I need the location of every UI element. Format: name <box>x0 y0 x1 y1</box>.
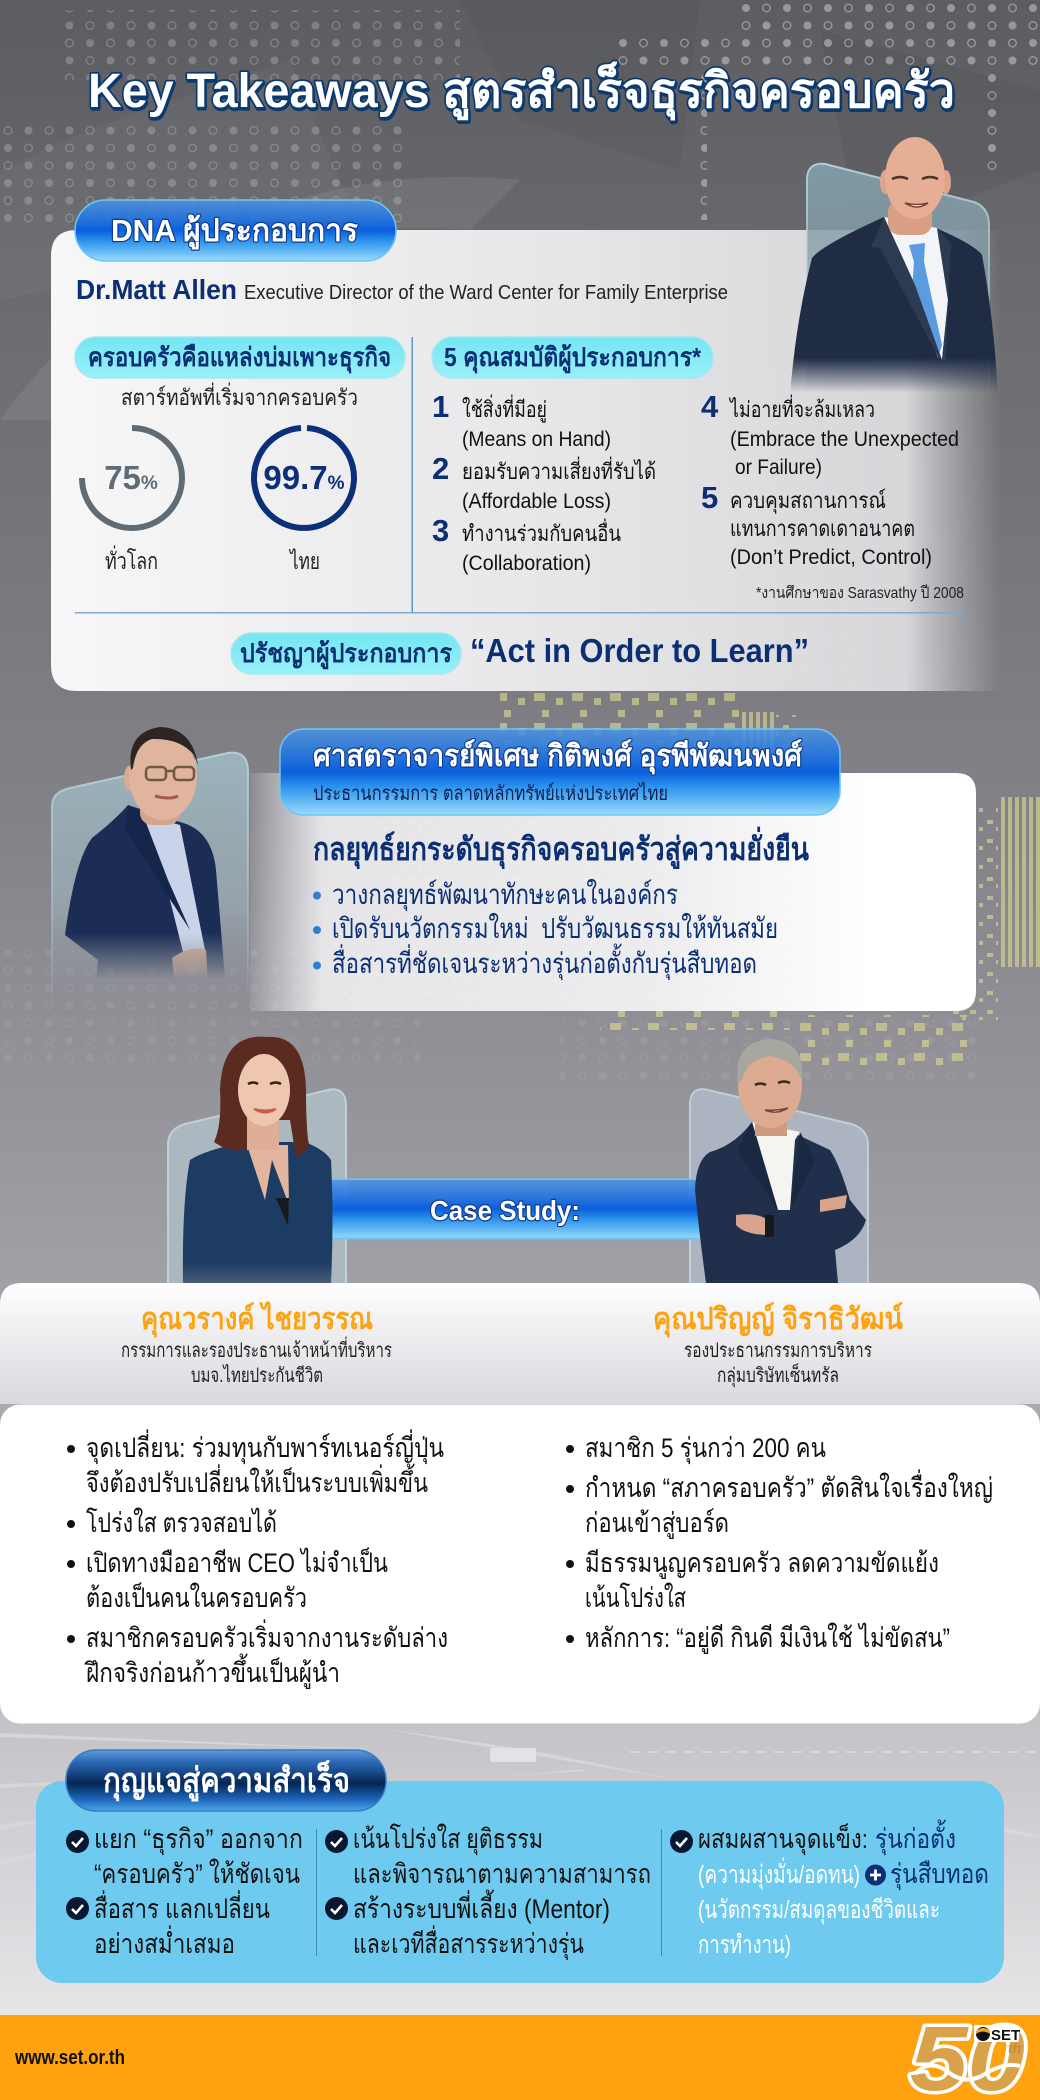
list: qualities column 1: 2 <box>432 451 449 486</box>
photo: chairman <box>65 727 226 990</box>
column 3: การทำงาน) <box>698 1931 791 1959</box>
logo: SET 50th: SET <box>991 2027 1020 2044</box>
speaker name: Dr.Matt Allen <box>76 274 237 305</box>
donut chart: 75%: 75% <box>104 459 158 496</box>
heading pill <box>66 1750 386 1811</box>
role: Parin: กลุ่มบริษัทเซ็นทรัล <box>717 1362 839 1388</box>
strategy bullets: สื่อสารที่ชัดเจนระหว่างรุ่นก่อตั้งกับรุ่นสืบทอด <box>332 943 757 981</box>
list: qualities column 1: ใช้สิ่งที่มีอยู่ <box>462 394 547 423</box>
list: qualities column 2: (Embrace the Unexpected <box>730 428 959 451</box>
panel: case study names <box>0 1283 1040 1404</box>
bullets: Parin: มีธรรมนูญครอบครัว ลดความขัดแย้ง <box>585 1548 939 1579</box>
bullets: Parin: สมาชิก 5 รุ่นกว่า 200 คน <box>585 1433 826 1465</box>
photo: Parin <box>695 1039 866 1283</box>
strategy bullets: เปิดรับนวัตกรรมใหม่ ปรับวัฒนธรรมให้ทันสมัย <box>332 912 778 944</box>
subheading: สตาร์ทอัพที่เริ่มจากครอบครัว <box>121 382 358 410</box>
donut chart: 99.7%: 99.7% <box>263 459 345 496</box>
column 2: เน้นโปร่งใส ยุติธรรม <box>353 1823 543 1856</box>
footer <box>0 2008 1040 2100</box>
list: qualities column 2: แทนการคาดเดาอนาคต <box>730 516 915 541</box>
strategy bullets <box>313 878 778 981</box>
name banner <box>280 729 840 815</box>
bullets: Warang <box>67 1429 448 1689</box>
column 3: ผสมผสานจุดแข็ง: <box>698 1821 868 1856</box>
list: qualities column 1: (Means on Hand) <box>462 428 611 451</box>
label: worldwide: ทั่วโลก <box>105 545 158 574</box>
glass card behind Parin <box>690 1089 868 1285</box>
logo: SET 50th: th <box>1008 2040 1021 2056</box>
panel: case study details <box>0 1404 1040 1724</box>
pill label: ปรัชญาผู้ประกอบการ <box>240 638 452 670</box>
column 2: และพิจารณาตามความสามารถ <box>353 1859 651 1889</box>
strategy heading: กลยุทธ์ยกระดับธุรกิจครอบครัวสู่ความยั่งยืน <box>313 826 809 870</box>
heading: กุญแจสู่ความสำเร็จ <box>103 1759 350 1802</box>
role: Warang: บมจ.ไทยประกันชีวิต <box>191 1364 323 1387</box>
bullets: Warang: จุดเปลี่ยน: ร่วมทุนกับพาร์ทเนอร์ญี่ปุ่น <box>86 1429 444 1465</box>
pill label: 5 คุณสมบัติผู้ประกอบการ* <box>444 342 702 374</box>
column 1: สื่อสาร แลกเปลี่ยน <box>94 1890 270 1924</box>
title: Key Takeaways สูตรสำเร็จธุรกิจครอบครัว <box>88 61 955 121</box>
strategy bullets: วางกลยุทธ์พัฒนาทักษะคนในองค์กร <box>332 878 678 912</box>
column 2: สร้างระบบพี่เลี้ยง (Mentor) <box>353 1889 610 1924</box>
pill: philosophy <box>231 633 461 674</box>
bullets: Warang: ต้องเป็นคนในครอบครัว <box>86 1580 307 1613</box>
photo: Dr. Matt Allen <box>790 137 998 395</box>
list: qualities column 1: ยอมรับความเสี่ยงที่รับได้ <box>462 456 656 484</box>
column 1: แยก “ธุรกิจ” ออกจาก <box>94 1824 303 1856</box>
speaker role: Executive Director of the Ward Center for Family Enterprise <box>244 282 728 304</box>
bullets: Warang: เปิดทางมืออาชีพ CEO ไม่จำเป็น <box>86 1545 388 1578</box>
list: qualities column 2: (Don’t Predict, Control) <box>730 546 932 569</box>
website: www.set.or.th <box>14 2047 125 2069</box>
panel: keys to success <box>36 1750 1004 1983</box>
column 2: และเวทีสื่อสารระหว่างรุ่น <box>353 1925 584 1961</box>
list: qualities column 2 <box>701 389 959 569</box>
list: qualities column 1: 3 <box>432 513 449 548</box>
bullets: Warang: สมาชิกครอบครัวเริ่มจากงานระดับล่าง <box>86 1619 448 1653</box>
section pill: DNA <box>75 200 396 261</box>
section heading: DNA ผู้ประกอบการ <box>111 213 358 250</box>
case study label: Case Study: <box>430 1195 580 1226</box>
panel background <box>51 230 1001 691</box>
column 3: รุ่นก่อตั้ง <box>875 1819 956 1856</box>
role: Warang <box>121 1336 392 1387</box>
bullets: Parin: ก่อนเข้าสู่บอร์ด <box>585 1507 729 1539</box>
list: qualities column 2: 4 <box>701 389 719 424</box>
column 3: (ความมุ่งมั่น/อดทน) <box>698 1857 860 1890</box>
case study banner <box>330 1178 700 1240</box>
label: Thailand: ไทย <box>289 548 320 574</box>
column 3: รุ่นสืบทอด <box>890 1859 989 1891</box>
column 1: “ครอบครัว” ให้ชัดเจน <box>94 1858 300 1889</box>
column 2 <box>316 1823 651 1961</box>
bullets: Warang: โปร่งใส ตรวจสอบได้ <box>86 1507 277 1538</box>
donut chart: 99.7% <box>254 428 354 528</box>
column 1: อย่างสม่ำเสมอ <box>94 1925 235 1959</box>
bullets: Warang: ฝึกจริงก่อนก้าวขึ้นเป็นผู้นำ <box>84 1653 340 1689</box>
glass card behind Warang <box>168 1089 346 1285</box>
chairman role: ประธานกรรมการ ตลาดหลักทรัพย์แห่งประเทศไทย <box>313 782 668 805</box>
name: Parin: คุณปริญญ์ จิราธิวัฒน์ <box>653 1302 903 1338</box>
list: qualities column 1: (Collaboration) <box>462 552 591 575</box>
glass card behind chairman <box>52 753 248 1010</box>
bullets: Warang: จึงต้องปรับเปลี่ยนให้เป็นระบบเพิ่มขึ้น <box>86 1463 428 1498</box>
column 1 <box>66 1824 303 1959</box>
pill label: ครอบครัวคือแหล่งบ่มเพาะธุรกิจ <box>88 342 391 374</box>
pill: 5 qualities <box>432 337 713 378</box>
role: Parin: รองประธานกรรมการบริหาร <box>684 1340 872 1362</box>
list: qualities column 2: or Failure) <box>735 456 822 479</box>
footnote: *งานศึกษาของ Sarasvathy ปี 2008 <box>756 584 964 602</box>
donut chart: 75% <box>82 428 182 528</box>
bullets: Parin: หลักการ: “อยู่ดี กินดี มีเงินใช้ ไม่ขัดสน” <box>585 1622 950 1654</box>
panel: DNA entrepreneur <box>51 137 1001 691</box>
list: qualities column 2: 5 <box>701 480 718 515</box>
column 3: (นวัตกรรม/สมดุลของชีวิตและ <box>698 1896 940 1925</box>
column 3 <box>661 1819 989 1959</box>
chairman name: ศาสตราจารย์พิเศษ กิติพงศ์ อุรพีพัฒนพงศ์ <box>313 739 803 775</box>
list: qualities column 1: 1 <box>432 389 449 424</box>
bullets: Parin <box>566 1433 993 1654</box>
bullets: Parin: เน้นโปร่งใส <box>585 1582 686 1613</box>
name: Warang: คุณวรางค์ ไชยวรรณ <box>141 1301 373 1338</box>
pill: family incubator <box>75 337 405 378</box>
quote: “Act in Order to Learn” <box>470 632 809 669</box>
list: qualities column 2: ไม่อายที่จะล้มเหลว <box>728 394 875 422</box>
photo: Warang <box>183 1037 332 1283</box>
list: qualities column 1 <box>432 389 656 575</box>
panel background <box>250 773 976 1011</box>
list: qualities column 1: (Affordable Loss) <box>462 490 611 513</box>
role: Parin <box>684 1340 872 1388</box>
list: qualities column 1: ทำงานร่วมกับคนอื่น <box>462 518 621 546</box>
glass card behind Dr. Matt Allen <box>807 164 989 395</box>
role: Warang: กรรมการและรองประธานเจ้าหน้าที่บริหาร <box>121 1336 392 1362</box>
panel: strategy <box>52 727 976 1011</box>
list: qualities column 2: ควบคุมสถานการณ์ <box>730 488 886 514</box>
